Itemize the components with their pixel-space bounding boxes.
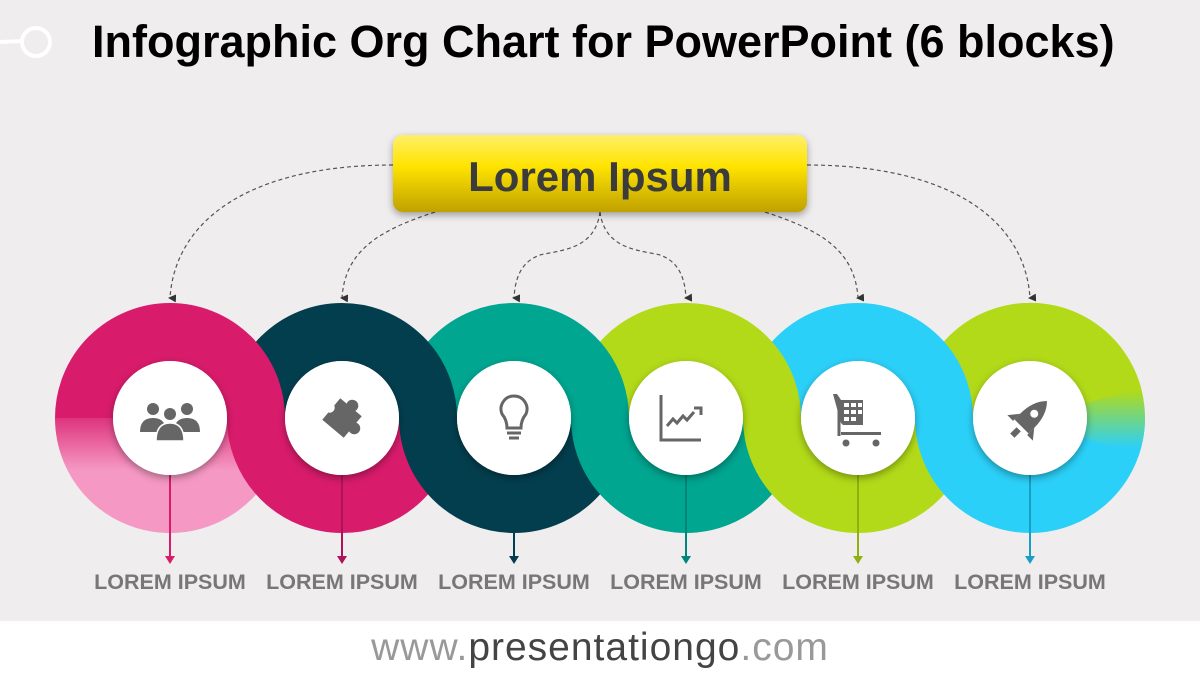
top box: Lorem Ipsum [468,153,732,200]
footer [0,621,1200,675]
ring bands [84,332,1116,504]
top box [393,135,807,212]
icon: puzzle [317,388,373,443]
icon: people [140,403,200,441]
footer: www.presentationgo.com [371,626,829,669]
title: Infographic Org Chart for PowerPoint (6 blocks) [92,16,1115,67]
icon: title pin [0,26,52,58]
labels: LOREM IPSUM [610,570,762,594]
labels: LOREM IPSUM [94,570,246,594]
arrows down [165,475,1035,564]
icon: bulb [501,396,527,438]
labels [94,570,1106,594]
labels: LOREM IPSUM [438,570,590,594]
labels: LOREM IPSUM [782,570,934,594]
icon: cart [833,394,881,446]
labels: LOREM IPSUM [954,570,1106,594]
connectors [170,165,1030,298]
white circles [113,361,1087,475]
icon: chart [661,395,701,440]
icon: rocket [1000,388,1060,448]
labels: LOREM IPSUM [266,570,418,594]
